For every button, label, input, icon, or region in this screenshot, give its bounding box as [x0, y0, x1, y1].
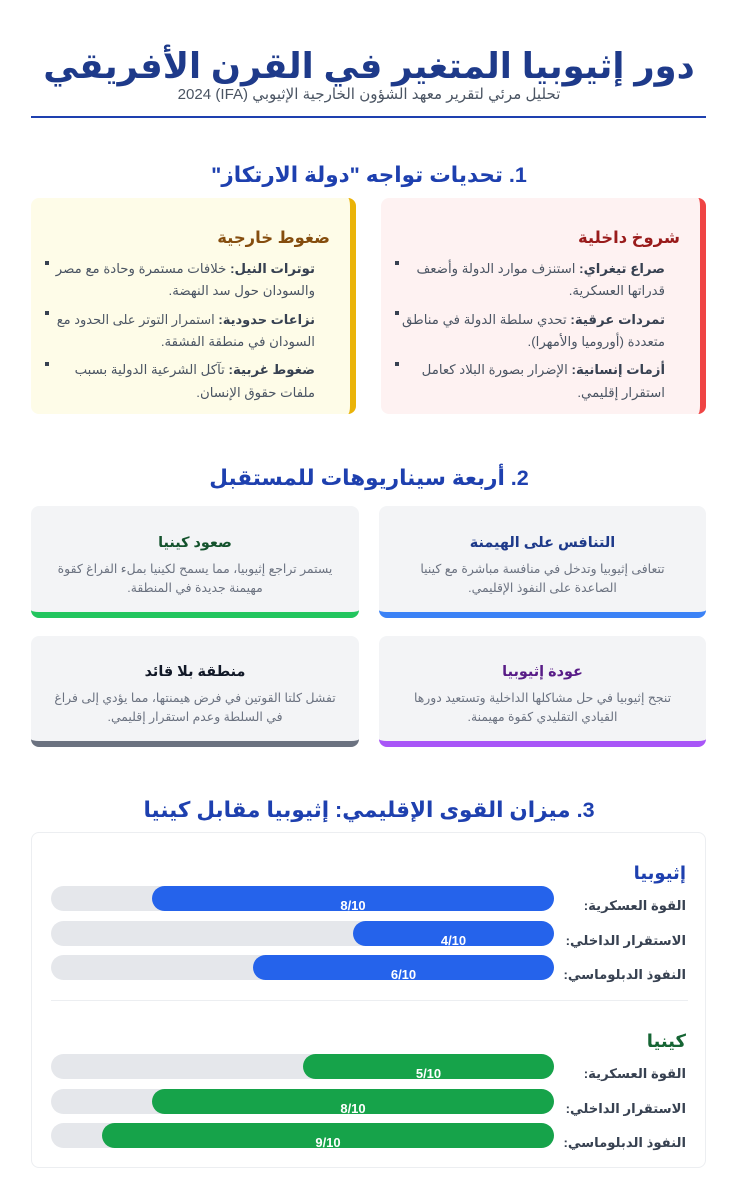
card text line 2: مهيمنة جديدة في المنطقة. — [127, 581, 263, 595]
subtitle: تحليل مرئي لتقرير معهد الشؤون الخارجية الإثيوبي (IFA) 2024 — [178, 86, 560, 103]
bar fill: 6/10 — [391, 967, 416, 982]
card title: التنافس على الهيمنة — [470, 535, 615, 551]
panel: external pressures — [31, 198, 356, 414]
bullet — [395, 362, 399, 366]
bar fill — [102, 1123, 554, 1148]
header — [31, 40, 706, 118]
country heading: Kenya: كينيا — [647, 1031, 686, 1051]
bar fill: 8/10 — [340, 1101, 366, 1116]
list item: توترات النيل: خلافات مستمرة وحادة مع مصر — [56, 261, 315, 276]
list item: نزاعات حدودية: استمرار التوتر على الحدود مع — [57, 312, 315, 327]
card text line 2: الصاعدة على النفوذ الإقليمي. — [468, 581, 617, 595]
list item continuation: السودان في منطقة الفشقة. — [161, 334, 315, 349]
list item: صراع تيغراي: استنزف موارد الدولة وأضعف — [416, 261, 665, 276]
bar: diplomacy 6/10 — [51, 955, 554, 980]
panel: balance of power — [31, 832, 706, 1168]
card text: تنجح إثيوبيا في حل مشاكلها الداخلية وتستعيد دورها — [414, 691, 671, 705]
bullet — [45, 261, 49, 265]
list item: ضغوط غربية: تآكل الشرعية الدولية بسبب — [75, 362, 315, 377]
list item continuation: قدراتها العسكرية. — [569, 283, 665, 298]
list item: تمردات عرقية: تحدي سلطة الدولة في مناطق — [402, 312, 665, 327]
bar: stability 4/10 — [51, 921, 554, 946]
list item continuation: والسودان حول سد النهضة. — [169, 283, 315, 298]
heading: section 3: 3. ميزان القوى الإقليمي: إثيوبيا مقابل كينيا — [143, 798, 595, 822]
card text line 2: القيادي التقليدي كقوة مهيمنة. — [468, 710, 617, 724]
country heading: Ethiopia: إثيوبيا — [634, 863, 686, 883]
card title: منطقة بلا قائد — [145, 664, 245, 680]
card text: يستمر تراجع إثيوبيا، مما يسمح لكينيا بملء الفراغ كقوة — [58, 562, 332, 576]
bar: diplomacy 9/10 — [51, 1123, 554, 1148]
card: return of Ethiopia — [379, 636, 706, 747]
bullet — [45, 311, 49, 315]
label: الاستقرار الداخلي: — [566, 933, 686, 948]
panel heading: ضغوط خارجية — [217, 229, 330, 247]
bullet — [395, 261, 399, 265]
list item continuation: متعددة (أوروميا والأمهرا). — [528, 334, 665, 349]
label: النفوذ الدبلوماسي: — [563, 1135, 686, 1150]
card: leaderless region — [31, 636, 359, 747]
bullet — [45, 362, 49, 366]
bar fill: 5/10 — [416, 1066, 441, 1081]
bar: military 5/10 — [51, 1054, 554, 1079]
panel heading: شروخ داخلية — [578, 229, 680, 247]
card text: تفشل كلتا القوتين في فرض هيمنتها، مما يؤدي إلى فراغ — [54, 691, 336, 705]
bullet — [395, 311, 399, 315]
label: النفوذ الدبلوماسي: — [563, 967, 686, 982]
bar fill — [152, 1089, 554, 1114]
bar: stability 8/10 — [51, 1089, 554, 1114]
list item: أزمات إنسانية: الإضرار بصورة البلاد كعامل — [422, 362, 665, 377]
heading: section 2: 2. أربعة سيناريوهات للمستقبل — [209, 466, 529, 490]
heading: section 1: 1. تحديات تواجه "دولة الارتكاز" — [211, 163, 527, 187]
card text line 2: في السلطة وعدم استقرار إقليمي. — [108, 710, 282, 724]
panel: internal cracks — [381, 198, 706, 414]
bar fill — [152, 886, 554, 911]
bar fill — [353, 921, 554, 946]
bar fill: 9/10 — [315, 1135, 341, 1150]
bar fill: 8/10 — [340, 898, 366, 913]
label: القوة العسكرية: — [584, 898, 686, 913]
label: الاستقرار الداخلي: — [566, 1101, 686, 1116]
label: القوة العسكرية: — [584, 1066, 686, 1081]
list item continuation: ملفات حقوق الإنسان. — [196, 385, 315, 400]
bar fill — [253, 955, 554, 980]
bar fill — [303, 1054, 554, 1079]
card title: صعود كينيا — [158, 535, 232, 551]
bar fill: 4/10 — [441, 933, 466, 948]
card title: عودة إثيوبيا — [502, 664, 583, 680]
bar: military 8/10 — [51, 886, 554, 911]
list item continuation: استقرار إقليمي. — [577, 385, 665, 400]
card: rise of Kenya — [31, 506, 359, 618]
title: دور إثيوبيا المتغير في القرن الأفريقي — [43, 47, 695, 86]
card: competition for hegemony — [379, 506, 706, 618]
card text: تتعافى إثيوبيا وتدخل في منافسة مباشرة مع كينيا — [420, 562, 665, 576]
